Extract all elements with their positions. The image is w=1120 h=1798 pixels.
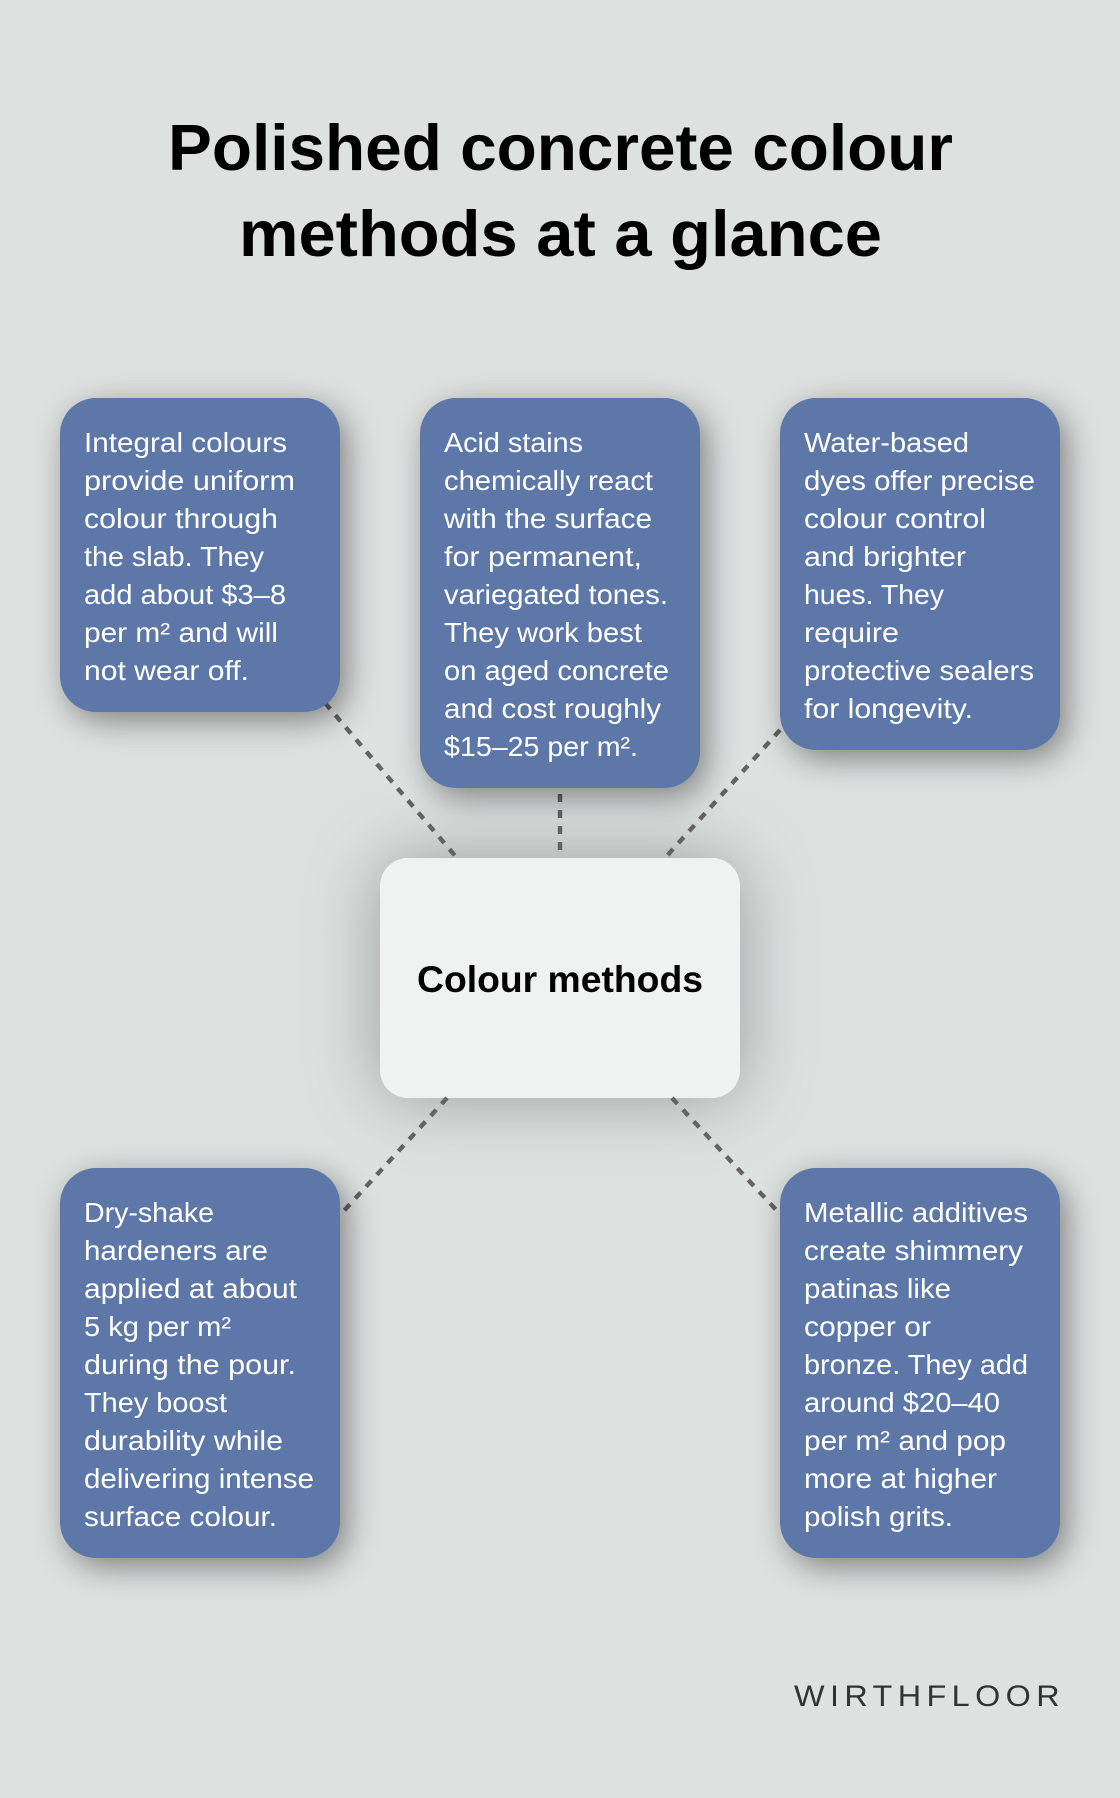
connector: water-based dyes to hub	[665, 730, 780, 858]
text: integral colours: per m² and will	[84, 617, 278, 648]
connector: dry-shake hardeners to hub	[341, 1098, 447, 1214]
text: water-based dyes: colour control	[804, 503, 986, 534]
text: dry-shake hardeners	[84, 1197, 314, 1532]
text: dry-shake hardeners: applied at about	[84, 1273, 297, 1304]
hub label: Colour methods	[417, 959, 703, 1000]
title	[168, 111, 953, 270]
logo: wirthfloor: WIRTHFLOOR	[794, 1680, 1065, 1713]
text: metallic additives: per m² and pop	[804, 1425, 1006, 1456]
text: water-based dyes: require	[804, 617, 899, 648]
text: acid stains: They work best	[444, 617, 642, 648]
text: acid stains	[443, 427, 669, 762]
text: metallic additives: polish grits.	[804, 1501, 953, 1532]
text: metallic additives	[804, 1197, 1028, 1532]
text: acid stains: Acid stains	[444, 427, 583, 458]
text: acid stains: $15–25 per m².	[444, 731, 638, 762]
text: acid stains: for permanent,	[444, 541, 642, 572]
text: acid stains: and cost roughly	[444, 693, 661, 724]
text: metallic additives: bronze. They add	[804, 1349, 1028, 1380]
text: integral colours: add about $3–8	[84, 579, 286, 610]
text: water-based dyes: for longevity.	[804, 693, 973, 724]
title: methods at a glance	[239, 197, 882, 270]
text: dry-shake hardeners: delivering intense	[84, 1463, 314, 1494]
text: dry-shake hardeners: They boost	[84, 1387, 227, 1418]
panel: metallic additives	[780, 1168, 1060, 1558]
connector: metallic additives to hub	[672, 1098, 780, 1214]
connector: acid stains to hub	[558, 794, 562, 850]
panel: acid stains	[420, 398, 700, 788]
text: metallic additives: more at higher	[804, 1463, 997, 1494]
panel: water-based dyes	[780, 398, 1060, 750]
text: acid stains: chemically react	[444, 465, 653, 496]
panel: integral colours	[60, 398, 340, 712]
text: metallic additives: create shimmery	[804, 1235, 1023, 1266]
connector: integral colours to hub	[325, 703, 457, 858]
text: water-based dyes: and brighter	[804, 541, 966, 572]
text: integral colours: colour through	[84, 503, 278, 534]
text: dry-shake hardeners: during the pour.	[84, 1349, 296, 1380]
text: metallic additives: around $20–40	[804, 1387, 1000, 1418]
text: water-based dyes: hues. They	[804, 579, 944, 610]
text: dry-shake hardeners: surface colour.	[84, 1501, 277, 1532]
panel: dry-shake hardeners	[60, 1168, 340, 1558]
text: integral colours: the slab. They	[84, 541, 264, 572]
text: water-based dyes: Water-based	[804, 427, 969, 458]
central hub: colour methods	[380, 858, 740, 1098]
text: integral colours: not wear off.	[84, 655, 249, 686]
text: metallic additives: Metallic additives	[804, 1197, 1028, 1228]
text: integral colours: provide uniform	[84, 465, 295, 496]
text: metallic additives: patinas like	[804, 1273, 951, 1304]
text: acid stains: variegated tones.	[444, 579, 668, 610]
text: acid stains: with the surface	[443, 503, 652, 534]
text: integral colours: Integral colours	[84, 427, 287, 458]
text: dry-shake hardeners: 5 kg per m²	[84, 1311, 231, 1342]
text: acid stains: on aged concrete	[444, 655, 669, 686]
text: water-based dyes	[804, 427, 1035, 724]
text: dry-shake hardeners: Dry-shake	[84, 1197, 214, 1228]
text: water-based dyes: dyes offer precise	[804, 465, 1035, 496]
text: metallic additives: copper or	[804, 1311, 931, 1342]
text: dry-shake hardeners: hardeners are	[84, 1235, 268, 1266]
text: dry-shake hardeners: durability while	[84, 1425, 283, 1456]
text: water-based dyes: protective sealers	[804, 655, 1034, 686]
title: Polished concrete colour	[168, 111, 953, 184]
text: integral colours	[84, 427, 295, 686]
